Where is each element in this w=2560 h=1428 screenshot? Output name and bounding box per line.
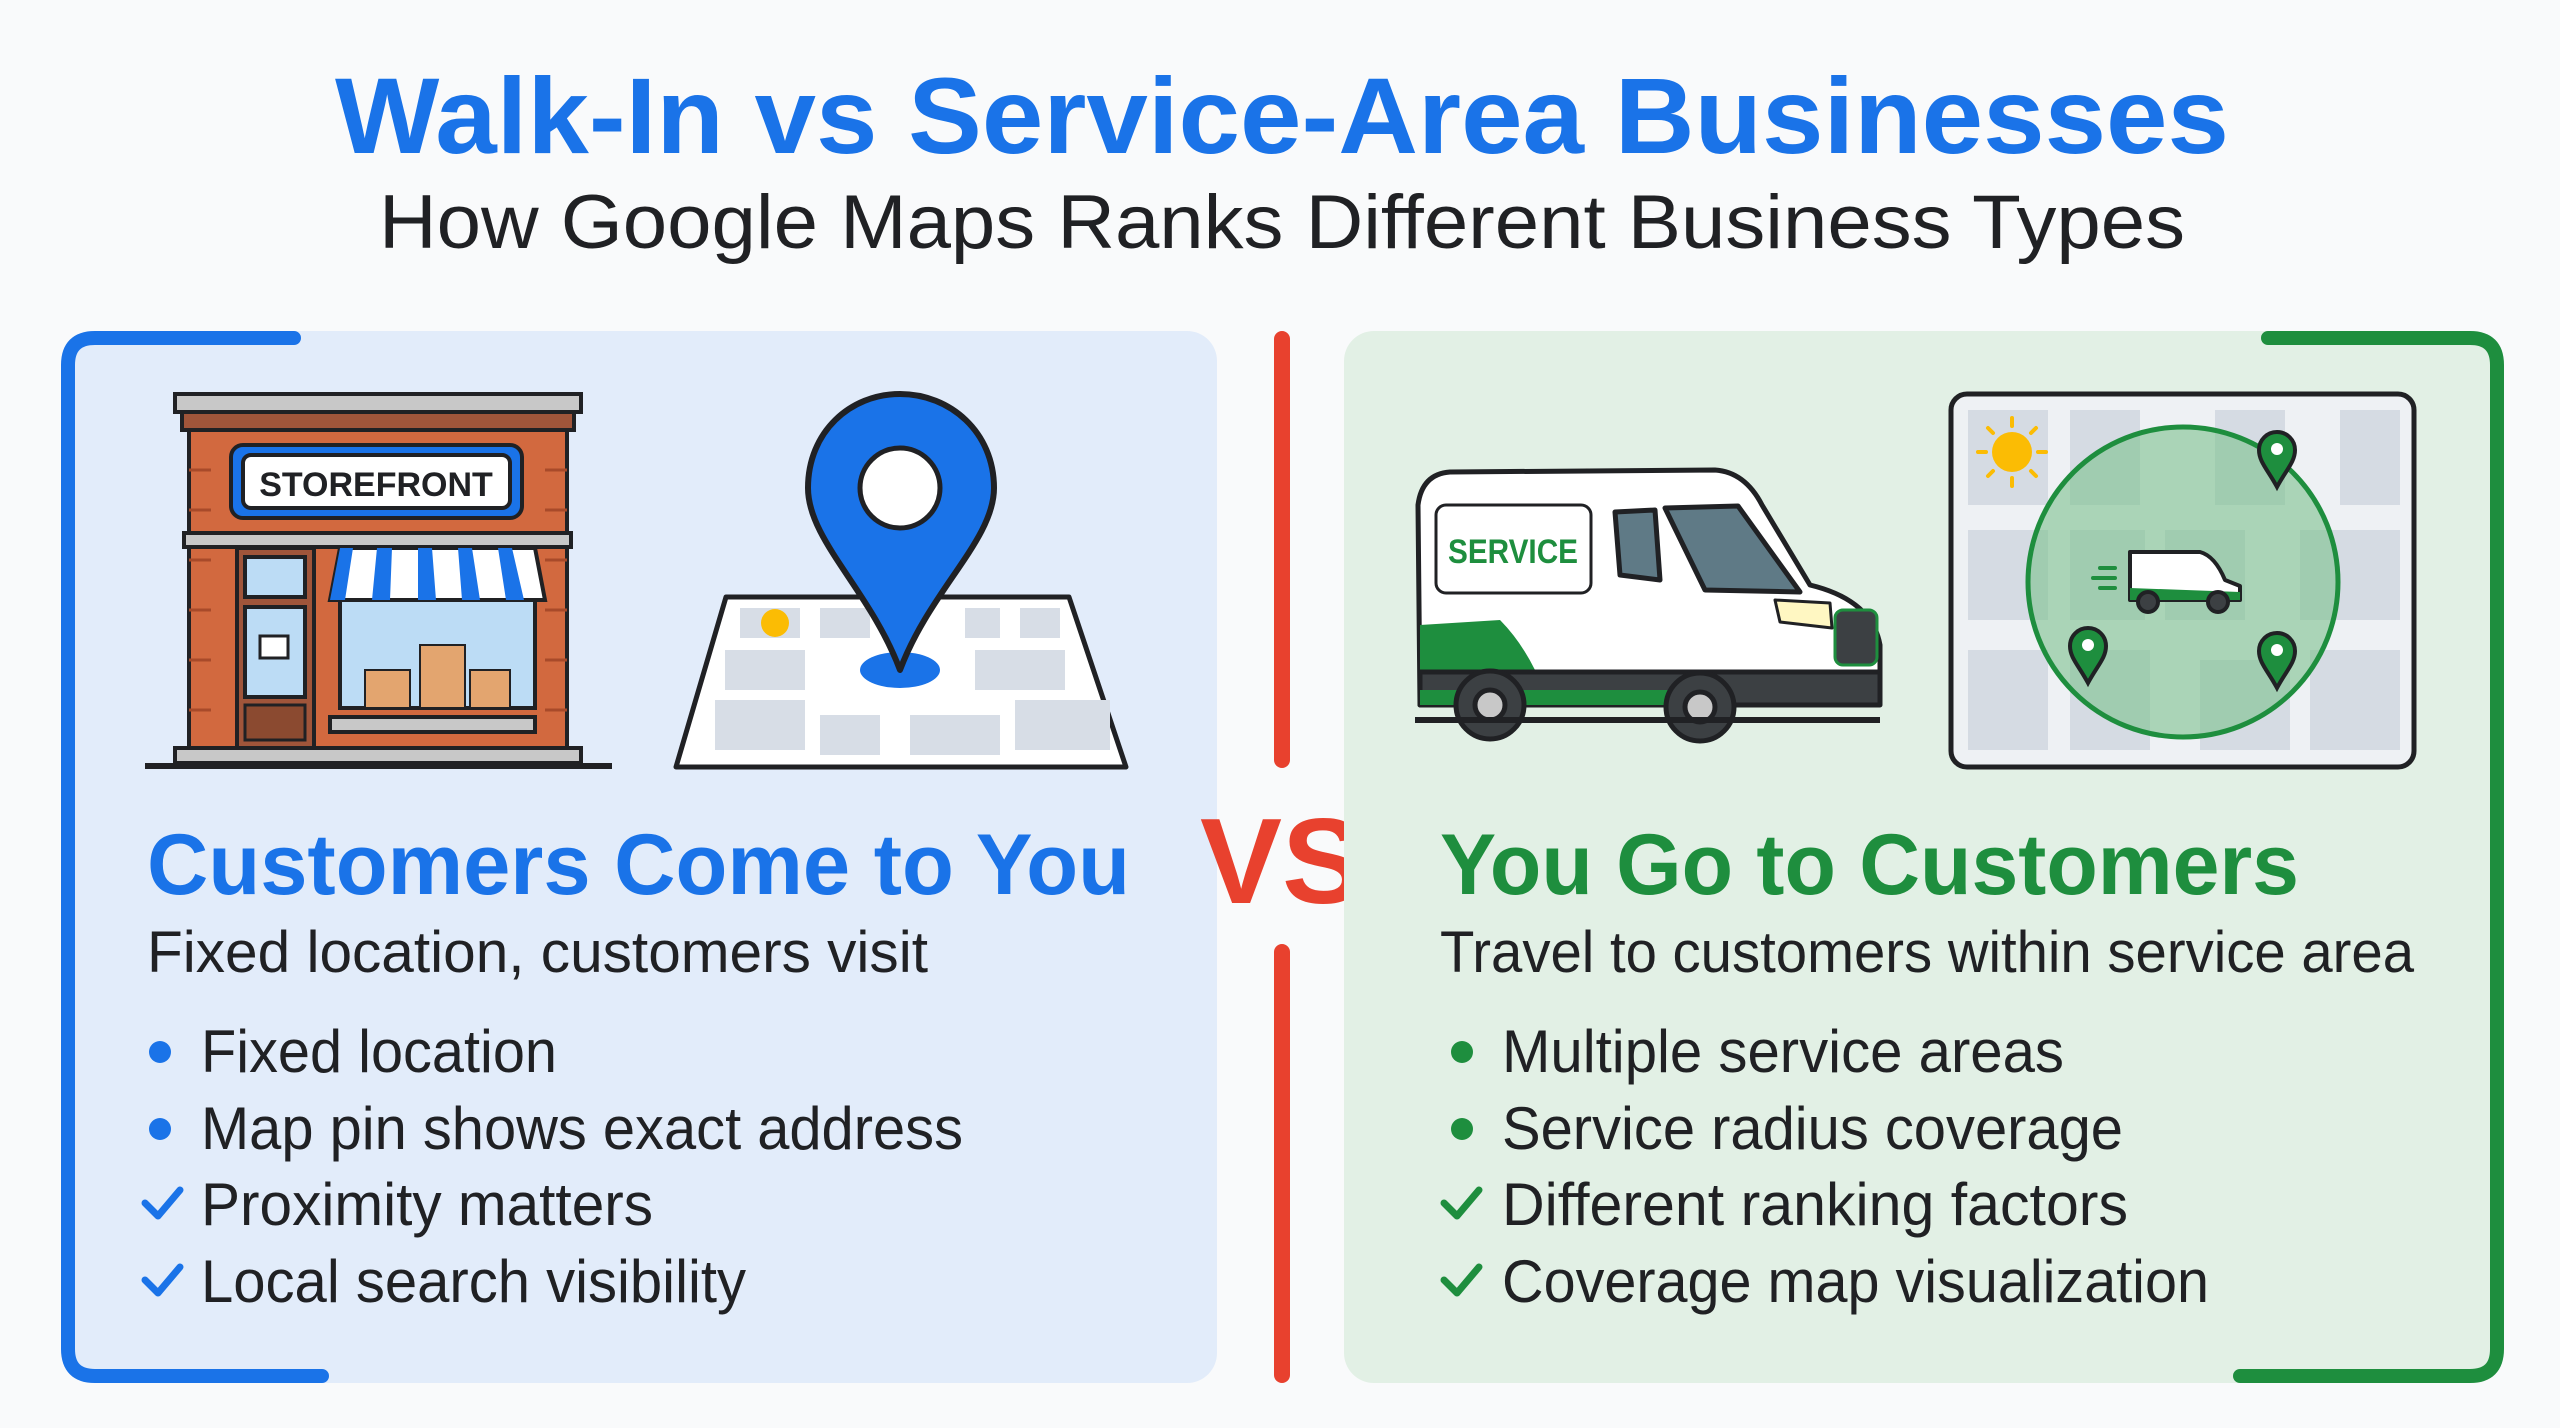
list: service-area features: Different ranking factors (1502, 1171, 2128, 1238)
list: service-area features: Multiple service areas (1502, 1018, 2064, 1085)
list: walk-in features: Local search visibility (201, 1248, 746, 1315)
list: walk-in features: Fixed location (201, 1018, 557, 1085)
title: Walk-In vs Service-Area Businesses (335, 55, 2229, 176)
heading: you go to customers: You Go to Customers (1440, 817, 2299, 913)
heading: customers come to you: Customers Come to You (147, 817, 1130, 913)
list: service-area features (1444, 1018, 2209, 1315)
icon: service van (1415, 470, 1880, 741)
panel: walk-in (62, 331, 1217, 1383)
subtitle: How Google Maps Ranks Different Business Types (379, 180, 2185, 265)
panel: service-area: SERVICE (1448, 533, 1578, 571)
divider with VS (1200, 331, 1364, 1383)
icon: coverage map (1951, 394, 2414, 767)
icon: map pin on map (676, 394, 1126, 767)
text: fixed location: Fixed location, customers visit (147, 920, 928, 985)
list: service-area features: Coverage map visualization (1502, 1248, 2209, 1315)
list: walk-in features (145, 1018, 963, 1315)
icon: storefront (145, 394, 612, 766)
divider with VS: VS (1200, 793, 1364, 929)
list: walk-in features: Map pin shows exact address (201, 1095, 963, 1162)
text: travel to customers: Travel to customers within service area (1440, 920, 2415, 985)
list: service-area features: Service radius coverage (1502, 1095, 2123, 1162)
list: walk-in features: Proximity matters (201, 1171, 653, 1238)
panel: walk-in: STOREFRONT (259, 466, 493, 504)
panel: service-area (1344, 331, 2503, 1383)
